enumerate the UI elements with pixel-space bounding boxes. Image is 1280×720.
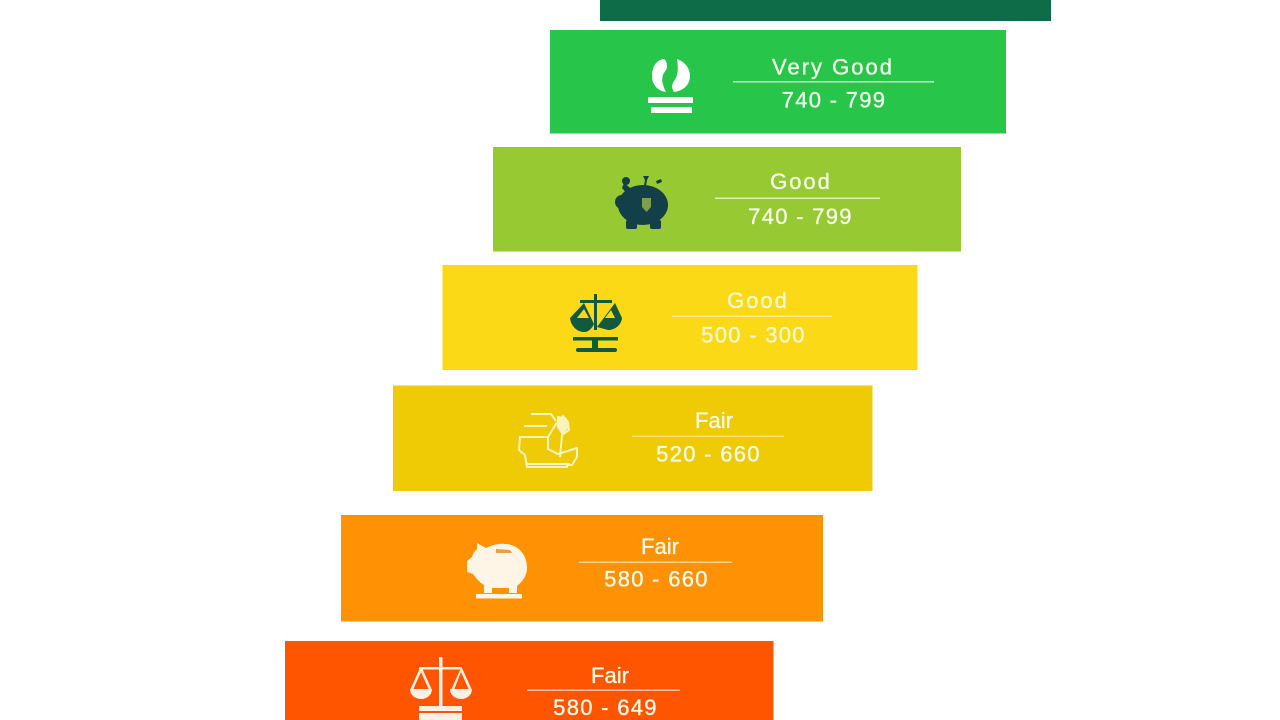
label: fair: Fair [591, 663, 629, 688]
icon: white leaf pair [648, 59, 693, 113]
panel: good step lime [493, 147, 961, 252]
icon: dark scales [570, 294, 622, 352]
label: fair: Fair [695, 408, 733, 433]
panel: fair step dark yellow [393, 386, 872, 491]
range: 580-660: 580 - 660 [604, 566, 709, 592]
label: fair: Fair [641, 534, 679, 559]
range: 740-799: 740 - 799 [782, 88, 886, 112]
panel: very good step [550, 30, 1006, 134]
range: 520-660: 520 - 660 [656, 442, 761, 466]
panel: fair step red-orange [285, 641, 774, 720]
panel: good step yellow [442, 265, 918, 370]
range: 500-300: 500 - 300 [701, 322, 806, 348]
icon: white piggy bank [467, 543, 527, 598]
panel: fair step orange [341, 515, 823, 622]
icon: dark piggy bank [615, 176, 668, 229]
label: good: Good [727, 288, 789, 313]
label: very good: Very Good [772, 54, 894, 80]
range: 740-799: 740 - 799 [748, 204, 853, 229]
range: 580-649: 580 - 649 [553, 695, 658, 720]
panel: top dark green step [600, 0, 1051, 21]
icon: outline hand and vessel [519, 414, 577, 467]
label: good: Good [770, 169, 832, 194]
icon: white scales [410, 657, 472, 720]
